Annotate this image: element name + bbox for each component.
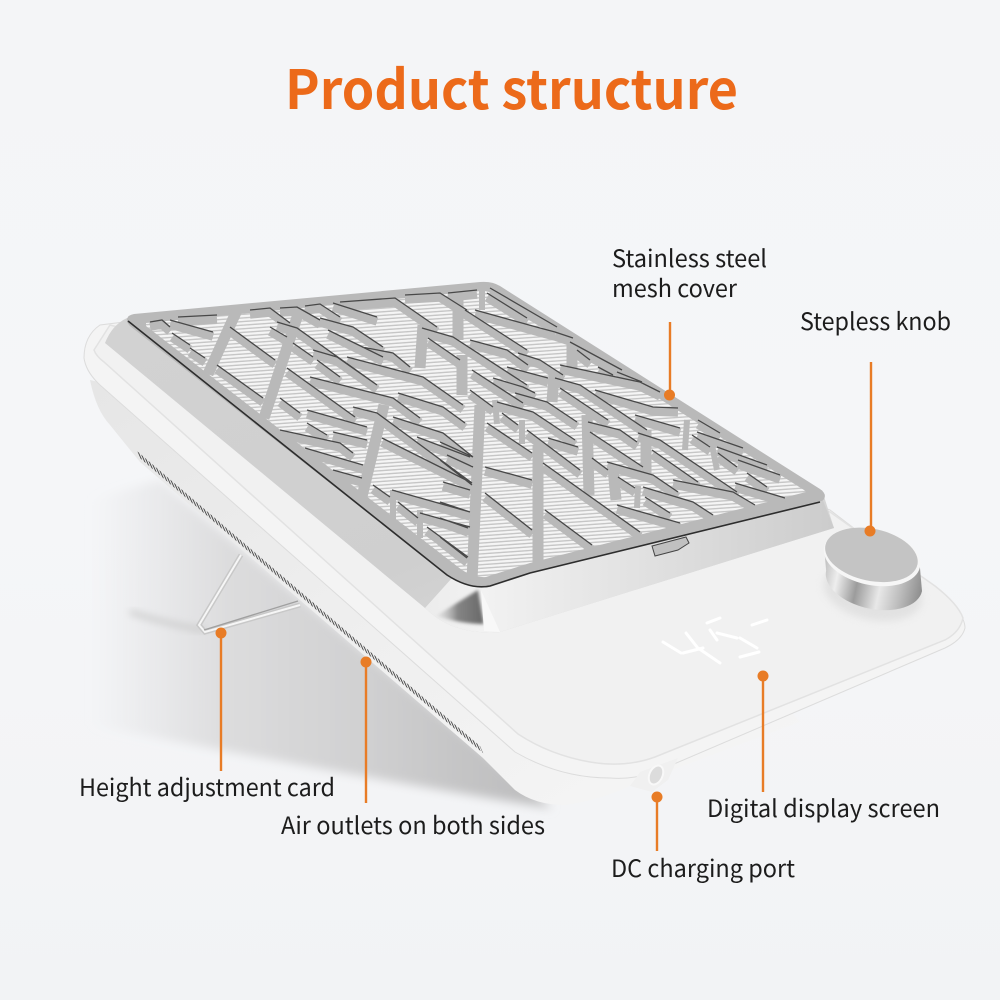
height adjustment stand <box>130 555 300 632</box>
callout: height adjustment card <box>79 628 335 803</box>
base outer rim <box>84 300 965 778</box>
callout: digital display screen: Digital display screen <box>707 789 940 824</box>
DC charging port <box>630 758 678 792</box>
plate edge shadow <box>128 321 820 587</box>
product: nail dust collector <box>84 282 965 808</box>
stepless knob <box>811 519 935 630</box>
callout: stainless steel mesh cover <box>612 239 767 400</box>
callout: stainless steel mesh cover: Stainless steel <box>612 239 767 274</box>
underside housing <box>90 380 800 805</box>
title: Product structure <box>285 46 738 125</box>
callout: DC charging port: DC charging port <box>611 849 795 884</box>
callout: DC charging port <box>611 792 795 884</box>
silver bevel <box>105 318 834 632</box>
callout: air outlets on both sides <box>281 656 545 841</box>
callout: stepless knob: Stepless knob <box>800 302 951 337</box>
mesh branches <box>150 292 785 562</box>
mesh slot shadows <box>150 288 785 558</box>
mesh trunks <box>208 295 646 580</box>
callout: air outlets on both sides: Air outlets on both sides <box>281 806 545 841</box>
filter pleats <box>146 291 806 577</box>
bevel front face <box>425 498 834 632</box>
callout: height adjustment card: Height adjustment card <box>79 768 335 803</box>
bevel dark reflection <box>436 590 484 624</box>
base top surface <box>94 325 963 764</box>
cast shadow under product <box>90 480 552 808</box>
callout: stepless knob <box>800 302 951 536</box>
air outlet vents <box>139 455 482 750</box>
stainless steel mesh plate <box>127 282 825 587</box>
callout: digital display screen <box>707 670 940 824</box>
callout: stainless steel mesh cover: mesh cover <box>612 269 738 304</box>
latch clip <box>652 537 689 556</box>
digital display 45 <box>663 618 767 663</box>
